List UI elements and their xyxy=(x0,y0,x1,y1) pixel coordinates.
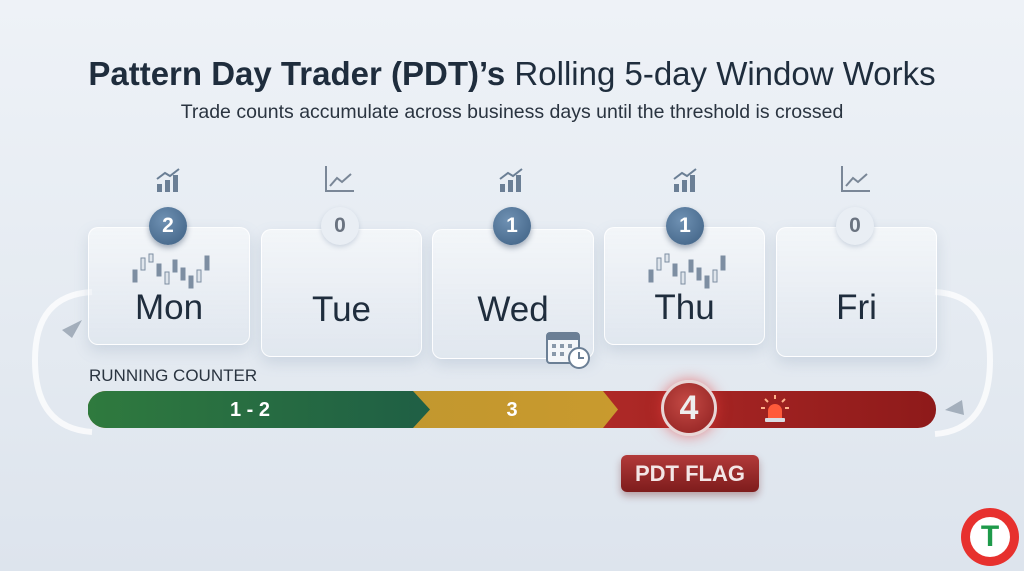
card: Fri xyxy=(776,227,937,357)
icon: line chart Fri xyxy=(841,166,870,192)
icon: bar chart Wed xyxy=(500,168,522,192)
badge Thu xyxy=(666,207,704,245)
badge Wed xyxy=(493,207,531,245)
card: Fri: Fri xyxy=(836,288,877,327)
icon: bar chart Thu xyxy=(674,168,696,192)
card: Thu xyxy=(604,227,765,345)
logo xyxy=(961,508,1019,566)
badge Thu: 1 xyxy=(679,214,691,237)
card: Tue: Tue xyxy=(312,290,371,329)
icons row xyxy=(156,166,870,192)
card: Wed: Wed xyxy=(477,290,549,329)
badge Fri: 0 xyxy=(849,214,861,237)
subtitle: Trade counts accumulate across business days until the threshold is crossed xyxy=(181,101,843,123)
circle 4: 4 xyxy=(680,389,698,427)
icon: line chart Tue xyxy=(325,166,354,192)
label: running counter: RUNNING COUNTER xyxy=(89,366,257,385)
candlesticks xyxy=(648,254,726,288)
badge Tue: 0 xyxy=(334,214,346,237)
badge Mon xyxy=(149,207,187,245)
icon: bar chart Mon xyxy=(156,168,180,192)
callout: PDT flag xyxy=(621,455,759,492)
icon: alarm xyxy=(761,395,789,422)
card: Mon xyxy=(88,227,250,345)
card: Tue xyxy=(261,229,422,357)
counter bar: 3 xyxy=(506,399,518,421)
title: Pattern Day Trader (PDT)’s Rolling 5-day Window Works xyxy=(88,55,936,92)
counter bar: 1 - 2 xyxy=(230,399,270,421)
badge Mon: 2 xyxy=(162,214,174,237)
badge Wed: 1 xyxy=(506,214,518,237)
counter bar xyxy=(88,391,936,428)
badge Tue xyxy=(321,207,359,245)
badge Fri xyxy=(836,207,874,245)
callout: PDT flag: PDT FLAG xyxy=(635,461,745,486)
card: Wed xyxy=(432,229,594,359)
icon: calendar clock xyxy=(546,332,590,369)
card: Thu: Thu xyxy=(654,288,715,327)
logo: T xyxy=(981,520,999,553)
circle 4 xyxy=(661,380,717,436)
candlesticks xyxy=(132,254,210,288)
card: Mon: Mon xyxy=(135,288,203,327)
